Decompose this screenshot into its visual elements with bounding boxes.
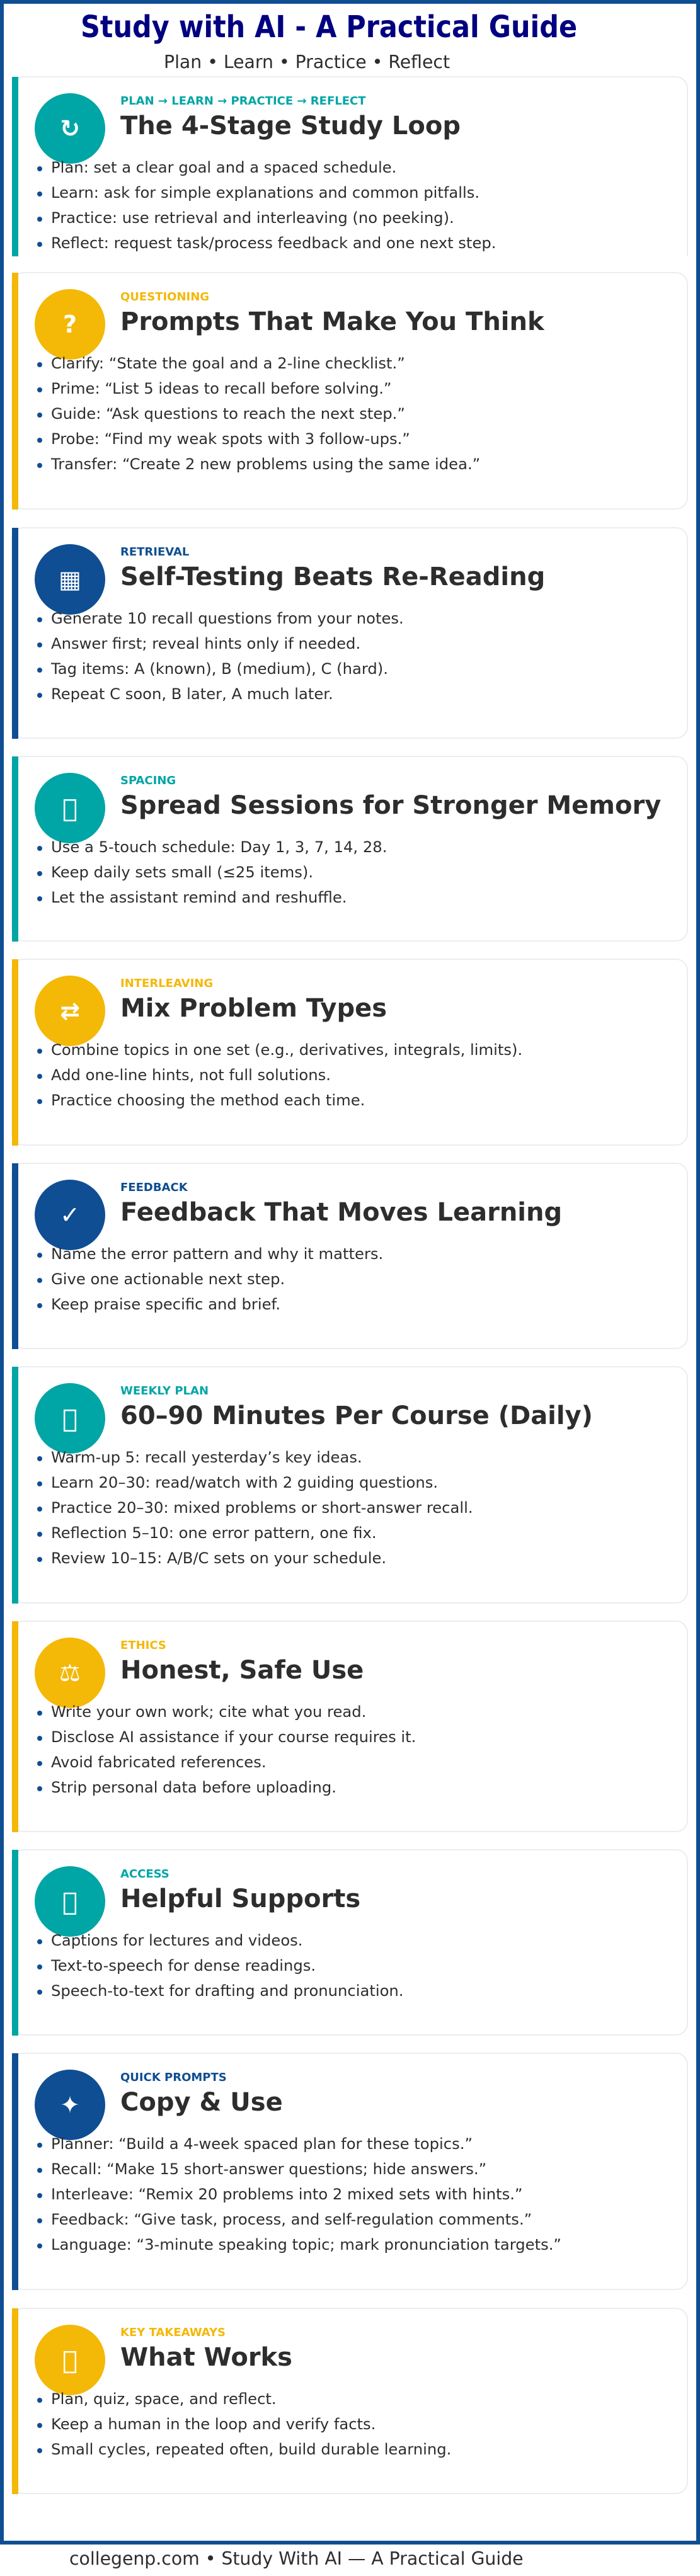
heading: What Works: [120, 2343, 292, 2372]
bullet list: Plan: set a clear goal and a spaced schedule.: [51, 158, 396, 176]
bullet list: Use a 5-touch schedule: Day 1, 3, 7, 14, 28.: [51, 838, 387, 856]
bullet list: Answer first; reveal hints only if needed.: [51, 634, 360, 653]
bullet list: Disclose AI assistance if your course requires it.: [51, 1728, 416, 1746]
bullet list: Warm-up 5: recall yesterday’s key ideas.: [51, 1448, 362, 1466]
bullet list: Interleave: “Remix 20 problems into 2 mixed sets with hints.”: [51, 2185, 522, 2203]
icon: swap arrows: [35, 976, 105, 1046]
bullet list: Add one-line hints, not full solutions.: [51, 1066, 331, 1084]
panel: copy and use: [12, 2053, 687, 2290]
bullet list: Reflection 5–10: one error pattern, one fix.: [51, 1524, 377, 1542]
bullet list: Avoid fabricated references.: [51, 1753, 267, 1771]
bullet list: Probe: “Find my weak spots with 3 follow-ups.”: [51, 430, 410, 448]
icon: grid: [35, 544, 105, 615]
bullet list: Combine topics in one set (e.g., derivatives, integrals, limits).: [51, 1040, 522, 1059]
bullet list: [37, 1040, 522, 1109]
bullet list: [37, 2390, 451, 2458]
bullet list: Tag items: A (known), B (medium), C (hard).: [50, 659, 388, 678]
heading: Copy & Use: [120, 2088, 283, 2117]
icon: missing glyph box: [35, 1866, 105, 1937]
bullet list: Keep a human in the loop and verify facts.: [51, 2415, 376, 2433]
kicker: SPACING: [120, 774, 176, 787]
bullet list: Practice: use retrieval and interleaving (no peeking).: [51, 208, 454, 227]
bullet list: Practice 20–30: mixed problems or short-answer recall.: [51, 1498, 473, 1517]
icon: scales: [35, 1638, 105, 1708]
icon: missing glyph box: [35, 1383, 105, 1454]
kicker: QUICK PROMPTS: [120, 2071, 227, 2084]
bullet list: [37, 838, 387, 906]
kicker: ACCESS: [120, 1867, 169, 1881]
panel: what works: [12, 2308, 687, 2494]
panel: prompts that make you think: [12, 273, 687, 510]
heading: Helpful Supports: [120, 1884, 360, 1913]
icon: loop: [35, 93, 105, 164]
bullet list: [37, 158, 496, 252]
kicker: WEEKLY PLAN: [120, 1384, 209, 1398]
bullet list: [37, 1448, 473, 1567]
bullet list: Captions for lectures and videos.: [51, 1931, 303, 1949]
icon: question mark: [35, 289, 105, 360]
bullet list: Speech-to-text for drafting and pronunciation.: [51, 1981, 403, 2000]
bullet list: Planner: “Build a 4-week spaced plan for these topics.”: [51, 2134, 473, 2153]
bullet list: Practice choosing the method each time.: [51, 1091, 365, 1109]
panel: mix problem types: [12, 959, 687, 1146]
icon: swap arrows: ⇄: [60, 997, 80, 1025]
icon: check mark: [35, 1180, 105, 1250]
bullet list: Prime: “List 5 ideas to recall before solving.”: [51, 379, 392, 397]
bullet list: Learn 20–30: read/watch with 2 guiding questions.: [51, 1473, 438, 1491]
footer: collegenp.com • Study With AI — A Practical Guide: [69, 2548, 524, 2569]
bullet list: Text-to-speech for dense readings.: [50, 1956, 316, 1975]
bullet list: Write your own work; cite what you read.: [51, 1702, 366, 1721]
heading: Feedback That Moves Learning: [120, 1198, 562, 1227]
bullet list: [37, 1931, 403, 2000]
kicker: ETHICS: [120, 1639, 166, 1652]
bullet list: Guide: “Ask questions to reach the next step.”: [51, 404, 405, 423]
bullet list: Generate 10 recall questions from your notes.: [51, 609, 404, 627]
bullet list: Recall: “Make 15 short-answer questions; hide answers.”: [51, 2160, 486, 2178]
bullet list: Keep praise specific and brief.: [51, 1295, 280, 1313]
icon: sparkle: ✦: [60, 2091, 80, 2119]
bullet list: [37, 2134, 561, 2254]
panel: 60-90 minutes per course: [12, 1367, 687, 1604]
panel: the 4-stage study loop: [12, 77, 687, 256]
bullet list: Name the error pattern and why it matters.: [51, 1245, 383, 1263]
icon: scales: ⚖: [59, 1659, 81, 1687]
panel: self-testing beats re-reading: [12, 528, 687, 739]
bullet list: [37, 1702, 416, 1796]
panel: helpful supports: [12, 1850, 687, 2036]
heading: Mix Problem Types: [120, 994, 387, 1023]
kicker: RETRIEVAL: [120, 545, 189, 559]
bullet list: Transfer: “Create 2 new problems using the same idea.”: [50, 455, 480, 473]
subtitle: Plan • Learn • Practice • Reflect: [164, 52, 450, 72]
heading: Spread Sessions for Stronger Memory: [120, 791, 661, 820]
bullet list: Small cycles, repeated often, build durable learning.: [51, 2440, 451, 2458]
bullet list: [37, 354, 480, 473]
kicker: FEEDBACK: [120, 1181, 188, 1194]
panel: spread sessions for stronger memory: [12, 756, 687, 942]
bullet list: Language: “3-minute speaking topic; mark pronunciation targets.”: [51, 2235, 561, 2254]
bullet list: Strip personal data before uploading.: [51, 1778, 336, 1796]
bullet list: Plan, quiz, space, and reflect.: [51, 2390, 277, 2408]
heading: 60–90 Minutes Per Course (Daily): [120, 1401, 593, 1430]
heading: The 4-Stage Study Loop: [120, 111, 461, 140]
bullet list: Feedback: “Give task, process, and self-regulation comments.”: [51, 2210, 532, 2228]
kicker: KEY TAKEAWAYS: [120, 2326, 226, 2339]
title: Study with AI - A Practical Guide: [81, 9, 577, 45]
icon: missing glyph box: [35, 2325, 105, 2395]
bullet list: Learn: ask for simple explanations and common pitfalls.: [51, 183, 479, 202]
heading: Prompts That Make You Think: [120, 307, 545, 336]
bullet list: Keep daily sets small (≤25 items).: [51, 863, 313, 881]
bullet list: [37, 609, 404, 703]
bullet list: Review 10–15: A/B/C sets on your schedule.: [51, 1549, 386, 1567]
icon: loop: ↻: [60, 115, 80, 142]
bullet list: [37, 1245, 383, 1313]
bullet list: Repeat C soon, B later, A much later.: [51, 685, 333, 703]
heading: Honest, Safe Use: [120, 1656, 364, 1685]
bullet list: Let the assistant remind and reshuffle.: [51, 888, 347, 906]
bullet list: Clarify: “State the goal and a 2-line checklist.”: [51, 354, 405, 372]
heading: Self-Testing Beats Re-Reading: [120, 562, 545, 591]
icon: grid: ▦: [59, 566, 81, 593]
icon: sparkle: [35, 2070, 105, 2140]
kicker: PLAN → LEARN → PRACTICE → REFLECT: [120, 94, 366, 108]
icon: check mark: ✓: [60, 1201, 80, 1229]
kicker: INTERLEAVING: [120, 977, 213, 990]
icon: question mark: ?: [63, 311, 77, 338]
bullet list: Reflect: request task/process feedback and one next step.: [51, 234, 496, 252]
icon: missing glyph box: [35, 773, 105, 843]
bullet list: Give one actionable next step.: [51, 1270, 285, 1288]
panel: feedback that moves learning: [12, 1163, 687, 1349]
kicker: QUESTIONING: [120, 290, 209, 304]
panel: honest, safe use: [12, 1621, 687, 1832]
